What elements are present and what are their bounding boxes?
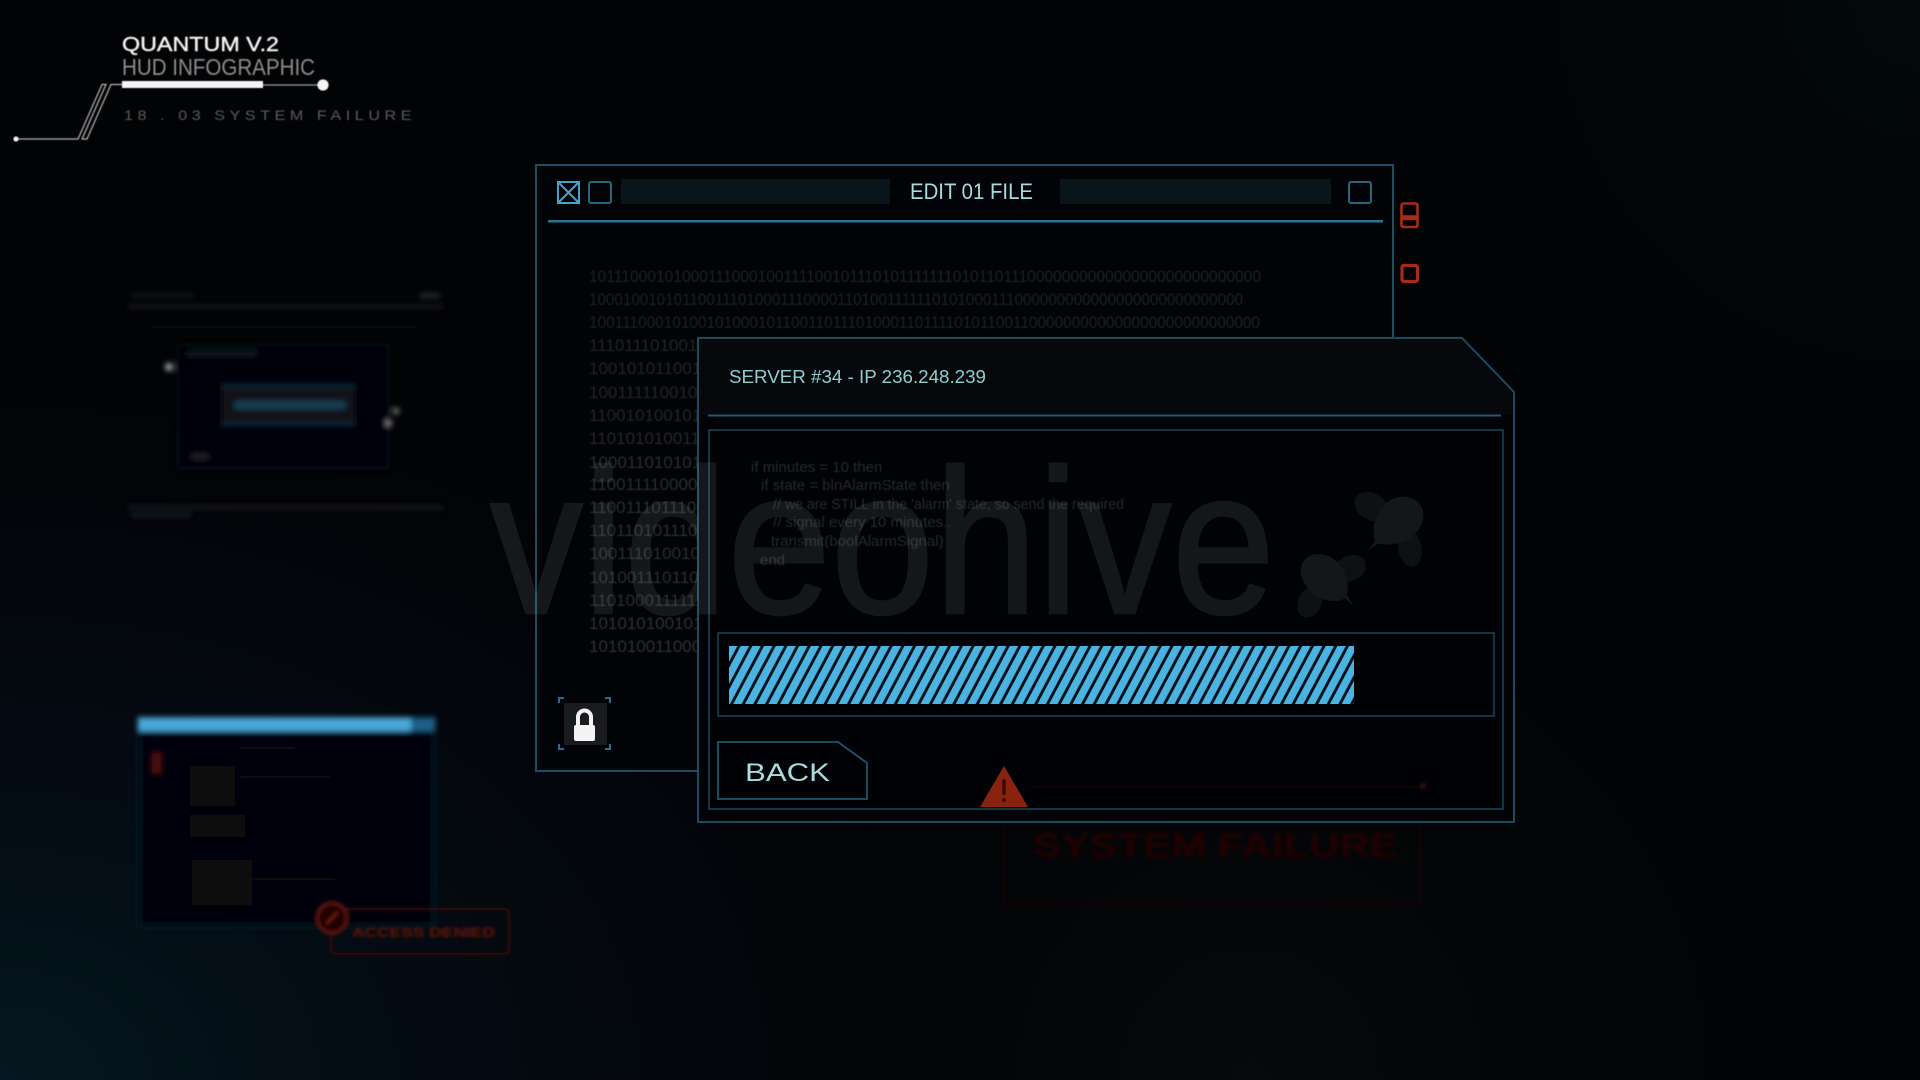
icon: maximize square <box>1349 182 1371 203</box>
subtitle: HUD Infographic: HUD INFOGRAPHIC <box>122 54 315 80</box>
code listing: transmit(boolAlarmSignal) <box>771 533 944 550</box>
panel: server window <box>698 338 1514 822</box>
heading: edit 01 file: EDIT 01 FILE <box>910 179 1033 204</box>
blurred badge: access denied <box>317 903 509 954</box>
date and section label: 18 . 03 SYSTEM FAILURE <box>124 107 416 123</box>
back button: BACK <box>745 759 830 787</box>
title bar segment left <box>621 179 890 204</box>
header rule <box>708 414 1501 416</box>
code listing: if state = blnAlarmState then <box>761 477 950 494</box>
blurred panel: access granted <box>128 293 443 517</box>
heading: server ip: SERVER #34 - IP 236.248.239 <box>729 367 986 387</box>
binary data block: 11001010010101 <box>589 406 720 425</box>
binary data block <box>589 267 1261 656</box>
binary data block: 10011100010100101000101100110111010001101111010110011000000000000000000000000000 <box>589 313 1260 332</box>
progress track <box>718 633 1494 716</box>
code listing: // signal every 10 minutes.. <box>773 514 951 531</box>
binary data block: 10111000101000111000100111100101110101111111010110111000000000000000000000000000 <box>589 267 1261 286</box>
binary data block: 11001110111001 <box>589 498 715 517</box>
binary data block: 10100111011011 <box>589 568 716 587</box>
binary data block: 10010101100101 <box>589 359 720 378</box>
warning triangle icon <box>980 766 1028 807</box>
binary data block: 11101110100101 <box>589 336 716 355</box>
blurred badge: access denied: ACCESS DENIED <box>352 924 495 940</box>
icon: window checkbox <box>589 182 611 203</box>
dim panel: system failure <box>1005 822 1420 904</box>
binary data block: 11011010111001 <box>589 521 716 540</box>
progress bar striped fill <box>729 646 1354 704</box>
code listing: end <box>760 552 785 569</box>
icon: red stop indicator <box>1402 266 1418 282</box>
binary data block: 11001111000001 <box>589 475 716 494</box>
binary data block: 10011101001001 <box>589 544 719 563</box>
binary data block: 10101010010110 <box>589 614 720 633</box>
watermark: videohive: videohive <box>490 427 1275 657</box>
binary data block: 11010001111110 <box>589 591 714 610</box>
binary data block: 11010101001110 <box>589 429 718 448</box>
code listing: if minutes = 10 then <box>751 459 882 476</box>
title rule with circuit trace <box>13 79 329 142</box>
binary data block: 10001101010110 <box>589 453 719 472</box>
warning trace line <box>1030 782 1426 790</box>
binary data block: 1000100101011001110100011100001101001111110101000111000000000000000000000000000 <box>589 290 1243 309</box>
icon: close checkbox <box>558 182 579 203</box>
panel: edit file window <box>536 165 1393 771</box>
title: Quantum V.2: QUANTUM V.2 <box>122 34 279 56</box>
header rule <box>548 220 1383 222</box>
code listing: // we are STILL in the 'alarm' state, so send the required <box>773 496 1124 513</box>
title bar segment right <box>1060 179 1331 204</box>
blurred panel: access denied window <box>138 718 435 926</box>
code listing <box>751 459 1124 569</box>
title block <box>13 34 416 142</box>
inner content frame <box>709 430 1503 809</box>
binary data block: 10101001100010 <box>589 637 720 656</box>
header texture band <box>700 340 1512 414</box>
icon: bee logo <box>1292 486 1425 622</box>
back button <box>718 742 867 799</box>
icon: padlock <box>559 698 610 749</box>
binary data block: 10011111001010 <box>589 383 716 402</box>
icon: red file indicator <box>1402 204 1418 227</box>
dim panel: system failure: SYSTEM FAILURE <box>1033 827 1398 865</box>
